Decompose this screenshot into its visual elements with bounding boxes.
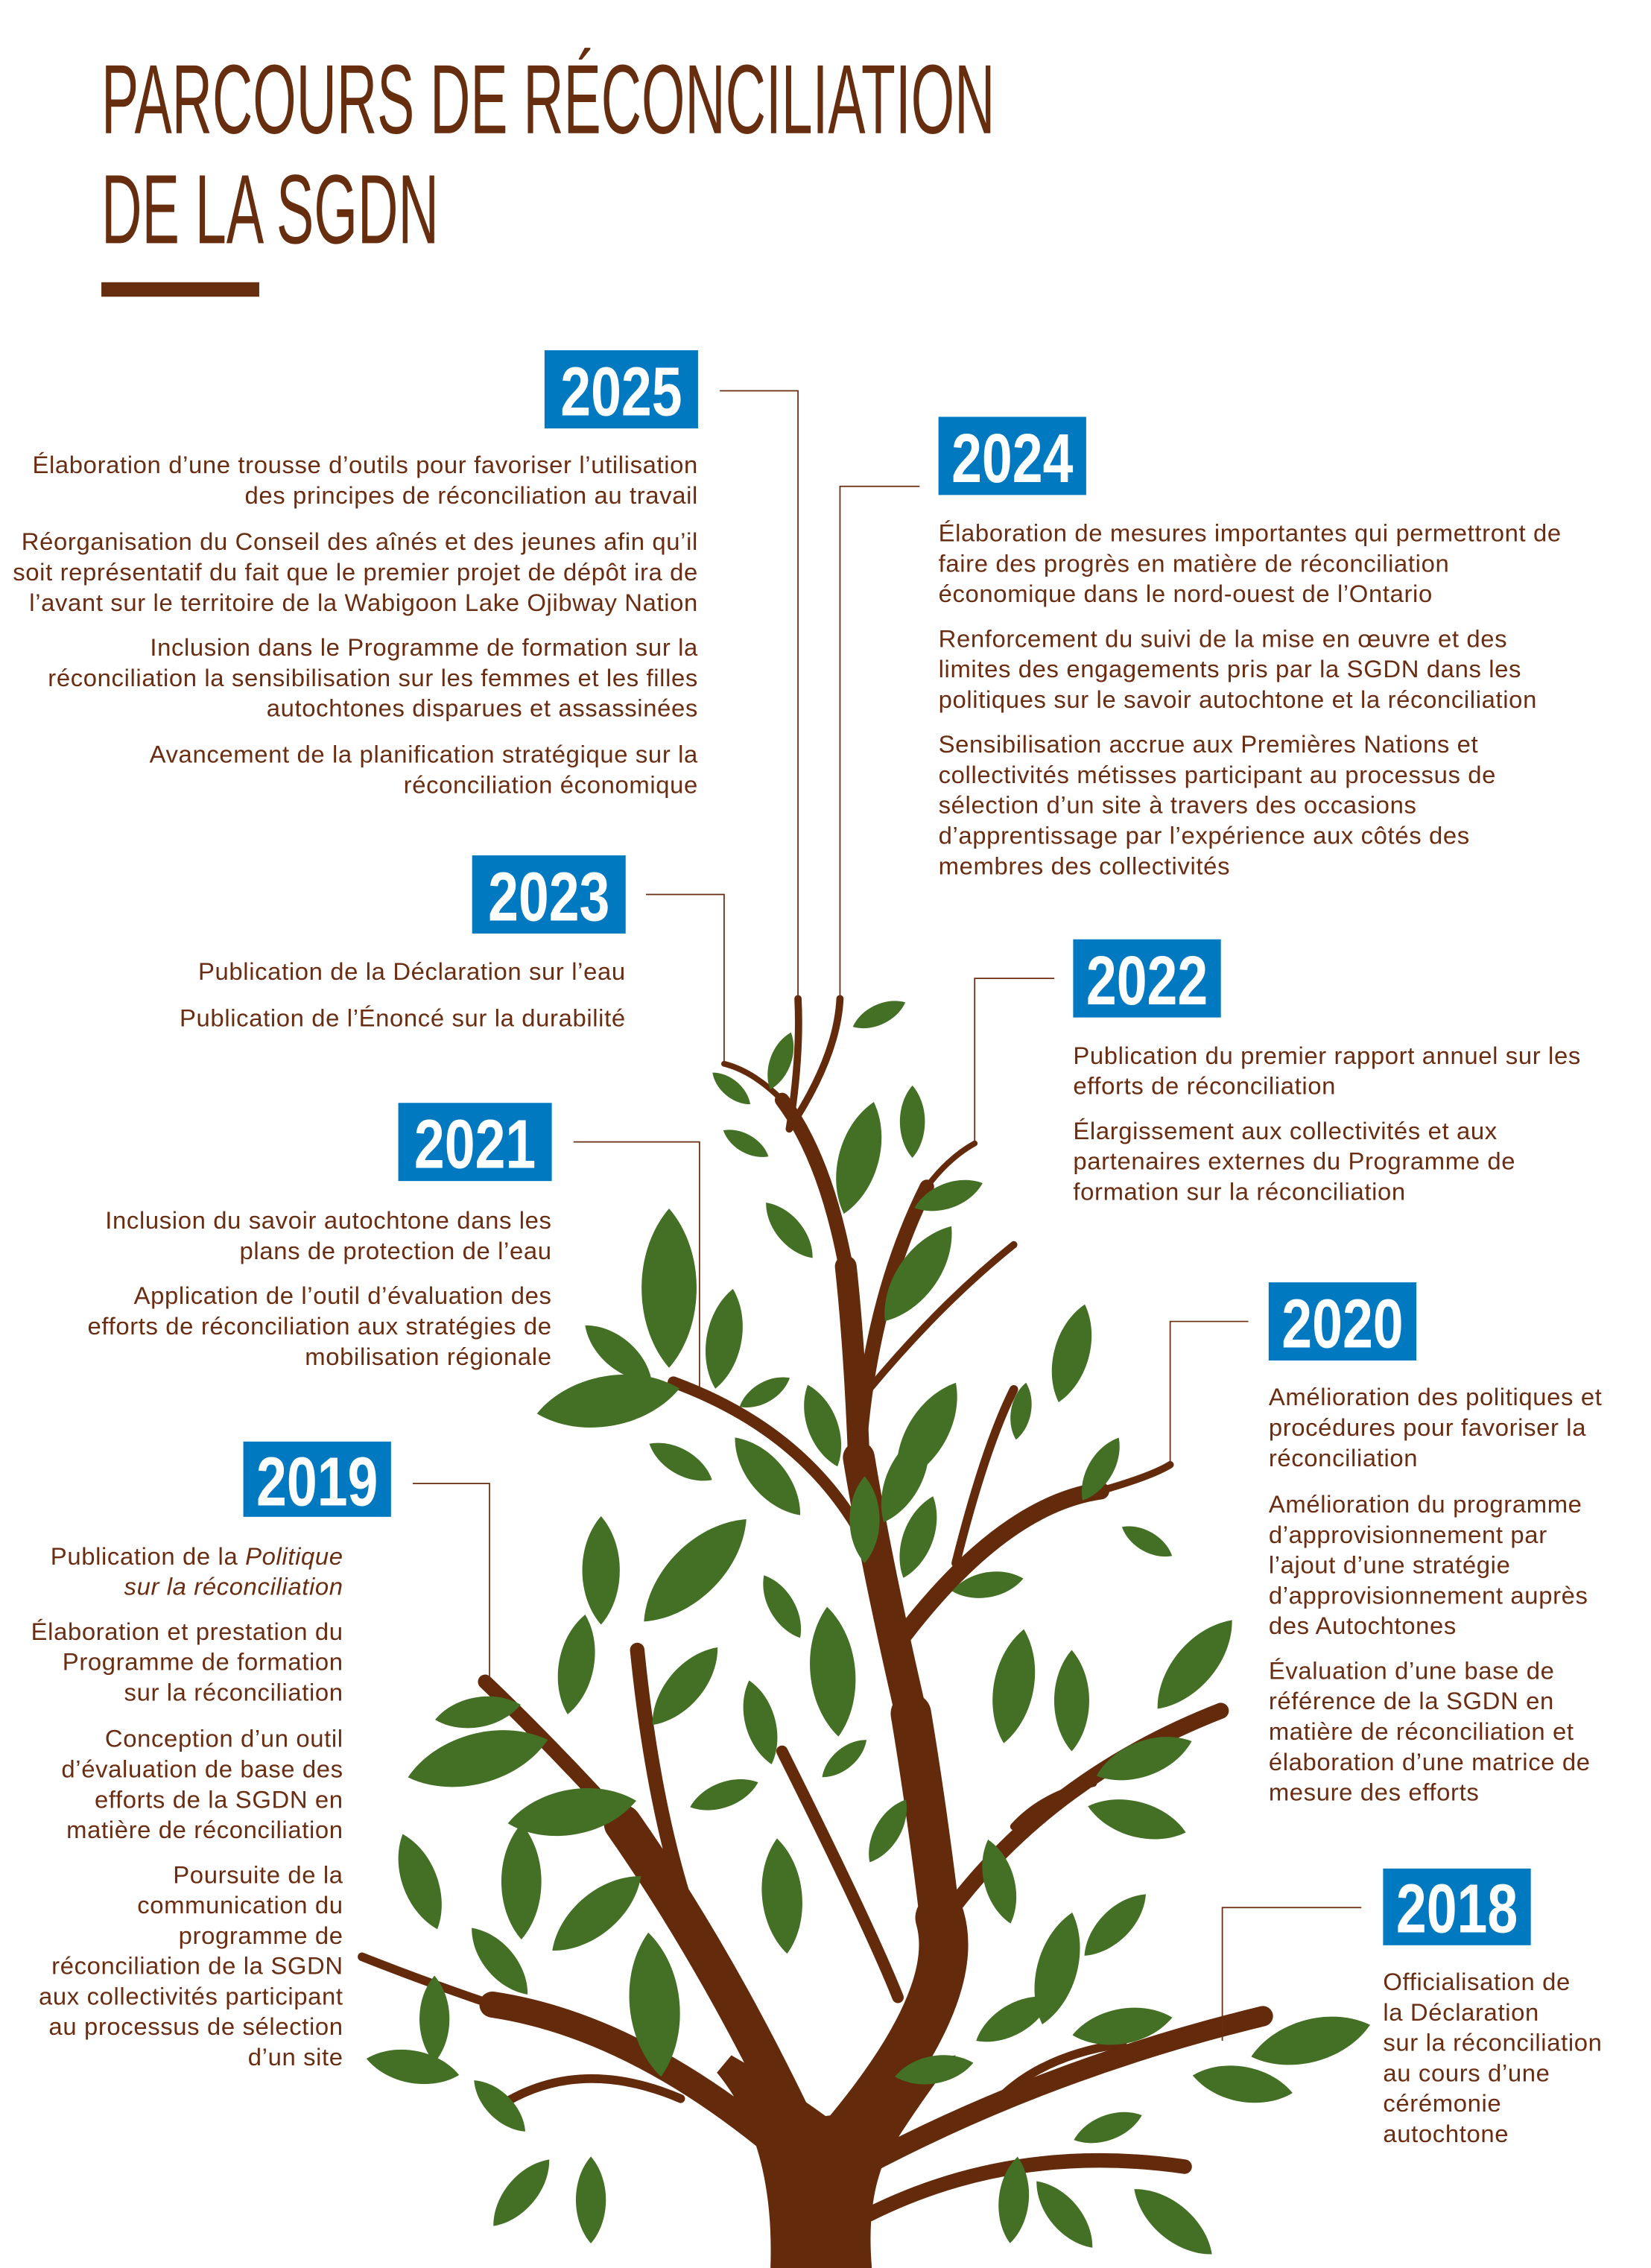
2024 text: collectivités métisses participant au processus de <box>939 761 1496 788</box>
2024 text: politiques sur le savoir autochtone et la réconciliation <box>939 685 1537 713</box>
2023 text: Publication de la Déclaration sur l’eau <box>198 957 626 985</box>
2025 text: Réorganisation du Conseil des aînés et des jeunes afin qu’il <box>22 528 698 555</box>
2025 text: autochtones disparues et assassinées <box>267 694 698 722</box>
2019 text: d’un site <box>248 2043 343 2071</box>
2024 text: d’apprentissage par l’expérience aux côtés des <box>939 822 1470 849</box>
2025 text: réconciliation économique <box>404 771 698 799</box>
2021 text <box>88 1206 552 1370</box>
2020 text: matière de réconciliation et <box>1269 1717 1574 1745</box>
2018 text: cérémonie <box>1383 2089 1501 2117</box>
2020 text: Amélioration des politiques et <box>1269 1383 1602 1410</box>
2022 text: partenaires externes du Programme de <box>1073 1147 1515 1175</box>
2024 text: sélection d’un site à travers des occasions <box>939 791 1417 819</box>
2025 text <box>13 451 698 799</box>
2018 text: sur la réconciliation <box>1383 2029 1603 2056</box>
2019 text: programme de <box>179 1922 343 1949</box>
2024 entry <box>939 416 1562 879</box>
2022 text: formation sur la réconciliation <box>1073 1177 1406 1205</box>
2021 text: efforts de réconciliation aux stratégies de <box>88 1312 552 1340</box>
2021 text: Inclusion du savoir autochtone dans les <box>105 1206 552 1234</box>
2020 text: l’ajout d’une stratégie <box>1269 1551 1510 1579</box>
2025 text: l’avant sur le territoire de la Wabigoon Lake Ojibway Nation <box>29 589 698 616</box>
2025 text: Inclusion dans le Programme de formation sur la <box>150 633 698 661</box>
title: PARCOURS DE RÉCONCILIATION <box>101 45 995 155</box>
2024 text <box>939 519 1562 879</box>
2019 text: Élaboration et prestation du <box>31 1618 343 1645</box>
2025 text: réconciliation la sensibilisation sur les femmes et les filles <box>48 664 698 691</box>
2020 text: d’approvisionnement par <box>1269 1521 1547 1548</box>
2025 entry <box>13 350 698 799</box>
2025 text: Avancement de la planification stratégique sur la <box>150 741 698 768</box>
2020 text: Évaluation d’une base de <box>1269 1656 1555 1684</box>
2022 text: Élargissement aux collectivités et aux <box>1073 1117 1498 1144</box>
connector lines <box>413 390 1361 2041</box>
2019 text: communication du <box>137 1891 343 1919</box>
2025 text: des principes de réconciliation au travail <box>245 481 698 509</box>
2020 text <box>1269 1383 1602 1806</box>
2024 text: limites des engagements pris par la SGDN dans les <box>939 655 1521 682</box>
2024 text: économique dans le nord-ouest de l’Ontario <box>939 580 1433 607</box>
2019 text: aux collectivités participant <box>39 1982 343 2009</box>
2020 text: réconciliation <box>1269 1444 1418 1472</box>
2024 text: membres des collectivités <box>939 852 1230 879</box>
2023 text: Publication de l’Énoncé sur la durabilité <box>180 1004 626 1031</box>
2021 text: mobilisation régionale <box>305 1343 552 1370</box>
2024 text: Renforcement du suivi de la mise en œuvre et des <box>939 624 1507 652</box>
2020 text: référence de la SGDN en <box>1269 1687 1554 1714</box>
2024 text: Élaboration de mesures importantes qui permettront de <box>939 519 1562 547</box>
2022 text <box>1073 1042 1581 1205</box>
2019 text <box>31 1542 343 2071</box>
year badge 2024: 2024 <box>951 419 1073 497</box>
2018 text <box>1383 1968 1603 2147</box>
2018 text: au cours d’une <box>1383 2059 1550 2086</box>
2018 text: la Déclaration <box>1383 1998 1539 2026</box>
2019 text: d’évaluation de base des <box>61 1755 343 1782</box>
2020 entry <box>1269 1282 1602 1806</box>
2022 text: Publication du premier rapport annuel sur les <box>1073 1042 1581 1069</box>
year badge 2022: 2022 <box>1086 942 1208 1019</box>
title underline bar <box>101 282 259 297</box>
2025 text: Élaboration d’une trousse d’outils pour favoriser l’utilisation <box>32 451 698 478</box>
2022 entry <box>1073 940 1581 1205</box>
2020 text: d’approvisionnement auprès <box>1269 1581 1588 1609</box>
2020 text: mesure des efforts <box>1269 1778 1479 1806</box>
2018 text: Officialisation de <box>1383 1968 1571 1995</box>
2019 text: sur la réconciliation <box>124 1679 343 1706</box>
year badge 2018: 2018 <box>1396 1869 1518 1947</box>
2019 text: matière de réconciliation <box>66 1816 343 1843</box>
leaves <box>364 993 1375 2268</box>
2024 text: Sensibilisation accrue aux Premières Nations et <box>939 730 1478 758</box>
year badge 2019: 2019 <box>256 1442 378 1520</box>
title: DE LA SGDN <box>101 154 439 265</box>
2018 text: autochtone <box>1383 2120 1509 2147</box>
2019 text: efforts de la SGDN en <box>95 1785 343 1813</box>
2020 text: procédures pour favoriser la <box>1269 1413 1586 1441</box>
tree trunk and branches <box>362 998 1263 2268</box>
2024 text: faire des progrès en matière de réconciliation <box>939 549 1449 577</box>
year badge 2020: 2020 <box>1281 1285 1404 1363</box>
2020 text: élaboration d’une matrice de <box>1269 1748 1591 1776</box>
2019 entry <box>31 1442 391 2071</box>
2022 text: efforts de réconciliation <box>1073 1072 1336 1100</box>
2019 text: au processus de sélection <box>48 2012 343 2040</box>
2019 text: Conception d’un outil <box>105 1725 343 1752</box>
tree <box>362 993 1375 2268</box>
year badge 2023: 2023 <box>488 858 609 935</box>
2020 text: des Autochtones <box>1269 1612 1457 1639</box>
2023 text <box>180 957 626 1031</box>
2019 text: Publication de la Politique <box>51 1542 343 1570</box>
year badge 2025: 2025 <box>560 353 682 431</box>
2020 text: Amélioration du programme <box>1269 1490 1582 1518</box>
2019 text: réconciliation de la SGDN <box>51 1952 343 1980</box>
2019 text: Programme de formation <box>63 1648 343 1676</box>
2018 entry <box>1383 1869 1603 2147</box>
2019 text: Poursuite de la <box>173 1860 343 1888</box>
2023 entry <box>180 855 626 1031</box>
2021 text: Application de l’outil d’évaluation des <box>134 1282 552 1309</box>
2019 text: sur la réconciliation <box>124 1573 343 1600</box>
2021 text: plans de protection de l’eau <box>240 1237 552 1264</box>
2025 text: soit représentatif du fait que le premier projet de dépôt ira de <box>13 558 698 586</box>
2021 entry <box>88 1103 552 1370</box>
title <box>101 45 995 265</box>
year badge 2021: 2021 <box>414 1106 536 1183</box>
